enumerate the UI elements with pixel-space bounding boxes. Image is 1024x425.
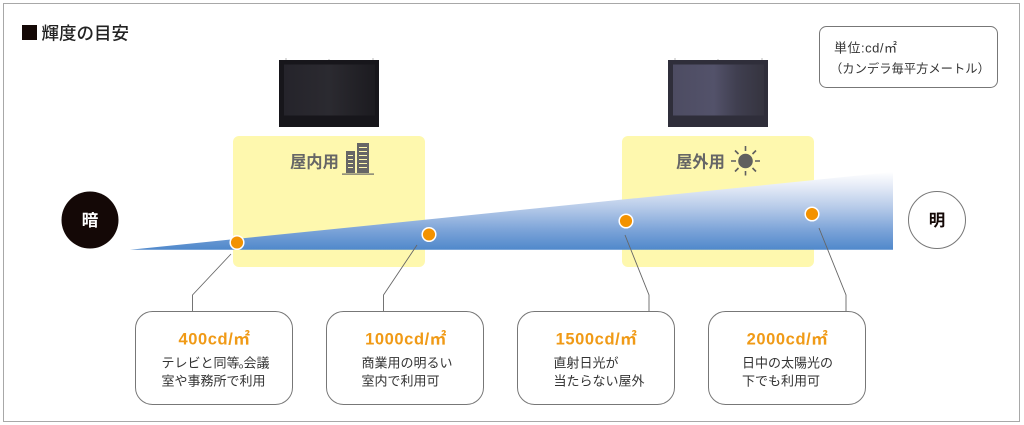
marker: 400: [230, 236, 244, 249]
card: 400: [136, 312, 292, 404]
card: 400: 室や事務所で利用: [162, 374, 266, 388]
leader: 2000: [819, 228, 846, 311]
card: 2000: 2000cd/㎡: [747, 330, 828, 348]
icon: buildings: [342, 143, 374, 175]
card: 1500: 直射日光が: [554, 356, 619, 370]
leader: 400: [192, 254, 231, 311]
outdoor monitor: [668, 58, 768, 127]
leader: 1000: [384, 245, 417, 311]
indoor monitor: [279, 58, 379, 127]
leader: 1500: [625, 235, 649, 311]
unit note: [820, 26, 998, 88]
unit note: （カンデラ毎平方メートル）: [830, 61, 990, 76]
icon: sun: [731, 146, 760, 176]
card: 1000: 室内で利用可: [362, 374, 440, 388]
card: 1000: 商業用の明るい: [362, 356, 453, 370]
panel: outdoor range: 屋外用: [676, 152, 725, 172]
marker: 1000: [422, 228, 436, 241]
card: 2000: 下でも利用可: [742, 374, 820, 388]
brightness wedge: [130, 172, 893, 250]
panel: outdoor range: [622, 136, 814, 267]
bright label: [908, 192, 966, 248]
card: 2000: 日中の太陽光の: [742, 356, 833, 370]
panel: indoor range: [233, 136, 425, 267]
card: 1500: 当たらない屋外: [554, 374, 645, 388]
unit note: 単位:cd/㎡: [834, 40, 897, 56]
bright label: 明: [929, 212, 945, 230]
card: 400: 400cd/㎡: [178, 330, 251, 348]
dark label: [62, 192, 118, 248]
card: 2000: [708, 312, 866, 404]
card: 400: テレビと同等。会議: [162, 356, 270, 370]
dark label: 暗: [82, 211, 99, 230]
title: 輝度の目安: [42, 24, 129, 44]
marker: 1500: [619, 214, 633, 228]
card: 1000: 1000cd/㎡: [365, 330, 447, 348]
card: 1500: 1500cd/㎡: [556, 330, 637, 348]
marker: 2000: [805, 207, 819, 221]
panel: indoor range: 屋内用: [290, 154, 339, 172]
card: 1000: [326, 312, 484, 404]
card: 1500: [518, 312, 674, 404]
